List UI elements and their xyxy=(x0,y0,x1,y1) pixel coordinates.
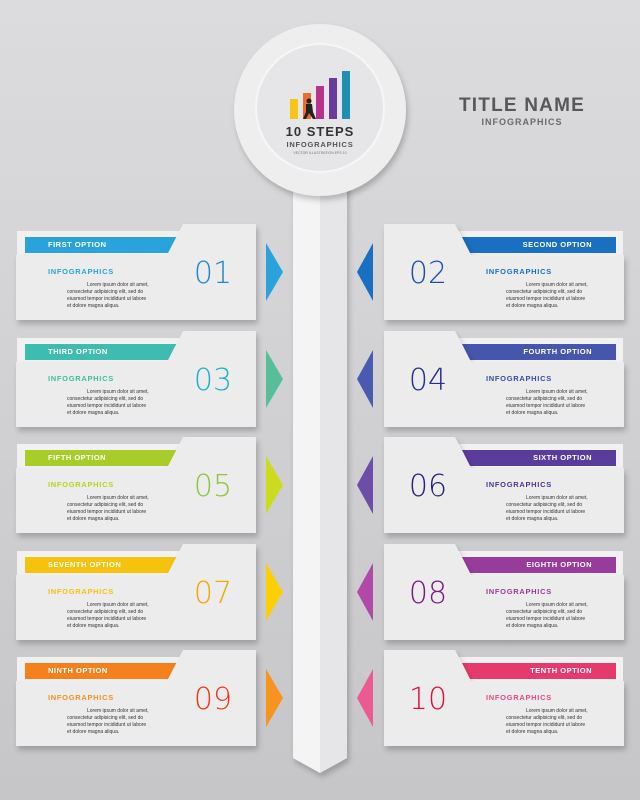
panel: ninth option xyxy=(16,650,283,746)
panel: tenth option: TENTH OPTION xyxy=(530,666,592,675)
panel: fourth option: consectetur adipisicing elit, sed do xyxy=(506,396,582,402)
panel: third option: 03 xyxy=(194,363,232,398)
panel: fifth option: INFOGRAPHICS xyxy=(48,480,114,489)
panel: fourth option: FOURTH OPTION xyxy=(523,347,592,356)
panel: tenth option: 10 xyxy=(409,682,447,717)
panel: tenth option: Lorem ipsum dolor sit amet, xyxy=(526,708,588,714)
panel: first option: 01 xyxy=(194,256,232,291)
panel: seventh option: 07 xyxy=(194,576,232,611)
panel: eighth option: 08 xyxy=(409,576,447,611)
panel: fifth option: FIFTH OPTION xyxy=(48,453,106,462)
panel: second option: INFOGRAPHICS xyxy=(486,267,552,276)
panel: fifth option: consectetur adipisicing elit, sed do xyxy=(67,502,143,508)
panel: tenth option xyxy=(357,650,624,746)
panel: fifth option: Lorem ipsum dolor sit amet, xyxy=(87,495,149,501)
circle text xyxy=(286,124,354,155)
panel: seventh option xyxy=(16,544,283,640)
panel: seventh option: Lorem ipsum dolor sit amet, xyxy=(87,602,149,608)
panel: fifth option: 05 xyxy=(194,469,232,504)
panel: fourth option: et dolore magna aliqua. xyxy=(506,410,558,416)
panel: sixth option: SIXTH OPTION xyxy=(533,453,592,462)
panel: fourth option xyxy=(357,331,624,427)
header circle xyxy=(234,24,406,196)
panel: third option: consectetur adipisicing elit, sed do xyxy=(67,396,143,402)
panel: third option: et dolore magna aliqua. xyxy=(67,410,119,416)
circle text: VECTOR ILLUSTRATION EPS 10 xyxy=(293,151,347,155)
panel: third option: Lorem ipsum dolor sit amet, xyxy=(87,389,149,395)
panel: fifth option: eiusmod tempor incididunt ut labore xyxy=(67,509,146,515)
panel: sixth option: et dolore magna aliqua. xyxy=(506,516,558,522)
panel: third option xyxy=(16,331,283,427)
panel: ninth option: eiusmod tempor incididunt ut labore xyxy=(67,722,146,728)
central column xyxy=(293,180,347,773)
panel: seventh option: INFOGRAPHICS xyxy=(48,587,114,596)
panel: eighth option: eiusmod tempor incididunt ut labore xyxy=(506,616,585,622)
panel: seventh option: et dolore magna aliqua. xyxy=(67,623,119,629)
panel: seventh option: SEVENTH OPTION xyxy=(48,560,121,569)
panel: first option: consectetur adipisicing elit, sed do xyxy=(67,289,143,295)
panel: ninth option: 09 xyxy=(194,682,232,717)
panel: ninth option: et dolore magna aliqua. xyxy=(67,729,119,735)
panel: second option: 02 xyxy=(409,256,447,291)
panel: fourth option: Lorem ipsum dolor sit amet, xyxy=(526,389,588,395)
panel: first option: eiusmod tempor incididunt ut labore xyxy=(67,296,146,302)
panel: sixth option: eiusmod tempor incididunt ut labore xyxy=(506,509,585,515)
title: INFOGRAPHICS xyxy=(481,117,563,127)
icon: bar chart xyxy=(290,71,350,119)
panel: first option: Lorem ipsum dolor sit amet, xyxy=(87,282,149,288)
panel: second option xyxy=(357,224,624,320)
panel: ninth option: INFOGRAPHICS xyxy=(48,693,114,702)
circle text: 10 STEPS xyxy=(286,124,354,139)
panel: seventh option: eiusmod tempor incididunt ut labore xyxy=(67,616,146,622)
panel: second option: consectetur adipisicing elit, sed do xyxy=(506,289,582,295)
panel: tenth option: eiusmod tempor incididunt ut labore xyxy=(506,722,585,728)
panel: ninth option: consectetur adipisicing elit, sed do xyxy=(67,715,143,721)
panel: third option: eiusmod tempor incididunt ut labore xyxy=(67,403,146,409)
panel: ninth option: Lorem ipsum dolor sit amet, xyxy=(87,708,149,714)
panel: fourth option: 04 xyxy=(409,363,447,398)
panel: first option: INFOGRAPHICS xyxy=(48,267,114,276)
panel: sixth option: consectetur adipisicing elit, sed do xyxy=(506,502,582,508)
panel: eighth option xyxy=(357,544,624,640)
panel: seventh option: consectetur adipisicing elit, sed do xyxy=(67,609,143,615)
panel: tenth option: consectetur adipisicing elit, sed do xyxy=(506,715,582,721)
panel: sixth option: 06 xyxy=(409,469,447,504)
panel: sixth option xyxy=(357,437,624,533)
panel: tenth option: et dolore magna aliqua. xyxy=(506,729,558,735)
panel: first option xyxy=(16,224,283,320)
panel: second option: et dolore magna aliqua. xyxy=(506,303,558,309)
panel: fifth option xyxy=(16,437,283,533)
panel: first option: et dolore magna aliqua. xyxy=(67,303,119,309)
panel: eighth option: INFOGRAPHICS xyxy=(486,587,552,596)
title xyxy=(459,95,585,127)
panel: sixth option: Lorem ipsum dolor sit amet, xyxy=(526,495,588,501)
circle text: INFOGRAPHICS xyxy=(286,140,354,149)
panel: second option: SECOND OPTION xyxy=(523,240,592,249)
panel: second option: Lorem ipsum dolor sit amet, xyxy=(526,282,588,288)
panel: eighth option: et dolore magna aliqua. xyxy=(506,623,558,629)
title: TITLE NAME xyxy=(459,95,585,116)
panel: sixth option: INFOGRAPHICS xyxy=(486,480,552,489)
panel: fourth option: INFOGRAPHICS xyxy=(486,374,552,383)
panel: ninth option: NINTH OPTION xyxy=(48,666,108,675)
panel: fourth option: eiusmod tempor incididunt ut labore xyxy=(506,403,585,409)
panel: first option: FIRST OPTION xyxy=(48,240,106,249)
panel: second option: eiusmod tempor incididunt ut labore xyxy=(506,296,585,302)
panel: eighth option: consectetur adipisicing elit, sed do xyxy=(506,609,582,615)
panel: tenth option: INFOGRAPHICS xyxy=(486,693,552,702)
panel: eighth option: EIGHTH OPTION xyxy=(526,560,592,569)
panel: third option: INFOGRAPHICS xyxy=(48,374,114,383)
panel: fifth option: et dolore magna aliqua. xyxy=(67,516,119,522)
panel: third option: THIRD OPTION xyxy=(48,347,108,356)
panel: eighth option: Lorem ipsum dolor sit amet, xyxy=(526,602,588,608)
